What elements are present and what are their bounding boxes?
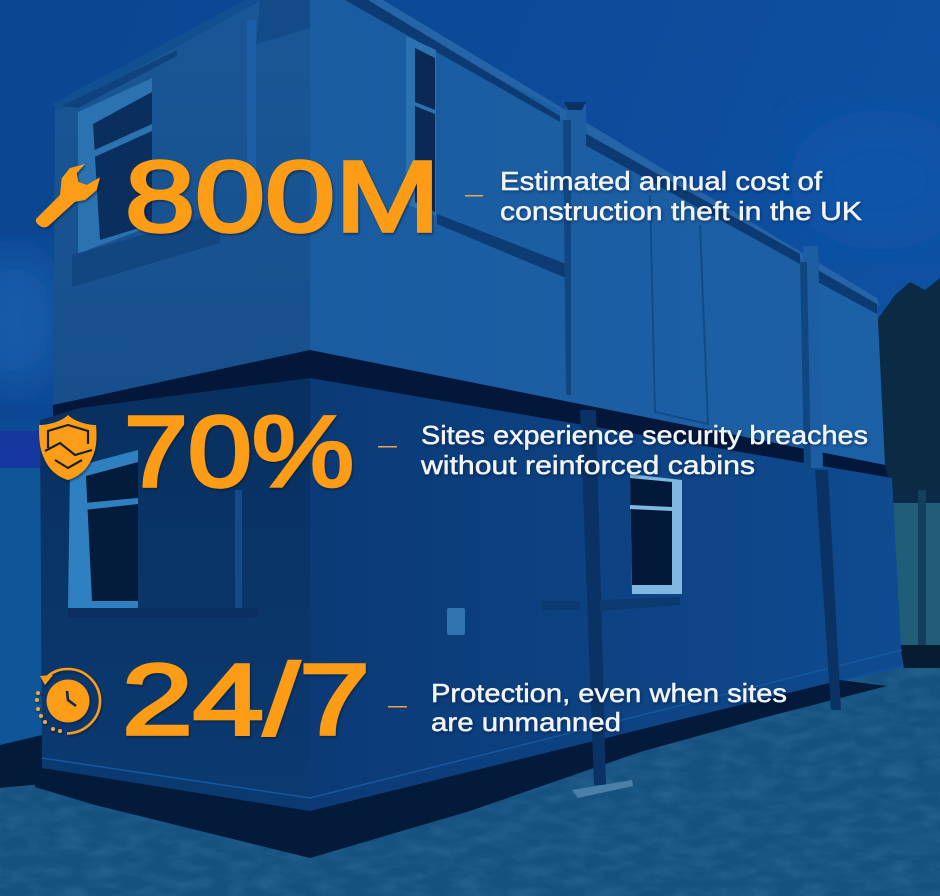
lower right face (310, 378, 902, 811)
upper left pilaster (247, 20, 256, 210)
big number: 800M (125, 141, 440, 253)
caption: construction theft in the UK (500, 196, 863, 226)
caption: without reinforced cabins (420, 450, 755, 480)
upper door panel (650, 195, 708, 424)
sky (0, 0, 940, 700)
dark gap under upper box (53, 350, 892, 492)
big number: 24/7 (122, 644, 370, 756)
wall socket (447, 608, 465, 635)
icon: clock (35, 669, 100, 734)
lower left sill (68, 608, 258, 618)
caption: Estimated annual cost of (500, 166, 823, 196)
dash (378, 446, 397, 448)
dash (388, 706, 407, 708)
stat row: 24/7 (35, 644, 787, 756)
stat row: 70% (39, 396, 868, 508)
neighbouring cabin left with sign (0, 420, 44, 790)
big number: 70% (124, 396, 354, 508)
caption (420, 420, 868, 480)
caption (500, 166, 863, 226)
dash (465, 195, 483, 196)
lower left window (68, 450, 138, 609)
upper right window (406, 36, 436, 216)
neighbouring cabin right (890, 488, 940, 668)
lower left face (40, 378, 310, 811)
upper left face (53, 0, 310, 405)
stat row: 800M (36, 141, 863, 253)
caption: Protection, even when sites (431, 678, 787, 708)
lower right window (630, 474, 682, 594)
upper right face (310, 0, 885, 465)
base edge lines (42, 650, 902, 798)
roof fascia (52, 0, 262, 112)
down pipes (563, 102, 841, 798)
caption: are unmanned (431, 707, 621, 737)
ground (0, 668, 940, 896)
icon: wrench (36, 164, 100, 228)
window recess shadow (72, 213, 220, 287)
upper left window (78, 78, 152, 254)
lower right sills (542, 597, 680, 611)
icon: shield (39, 415, 97, 480)
upper ledge (437, 214, 566, 278)
caption: Sites experience security breaches (421, 420, 868, 450)
trees (877, 278, 940, 500)
ground shadow (34, 680, 887, 858)
caption (431, 678, 787, 737)
